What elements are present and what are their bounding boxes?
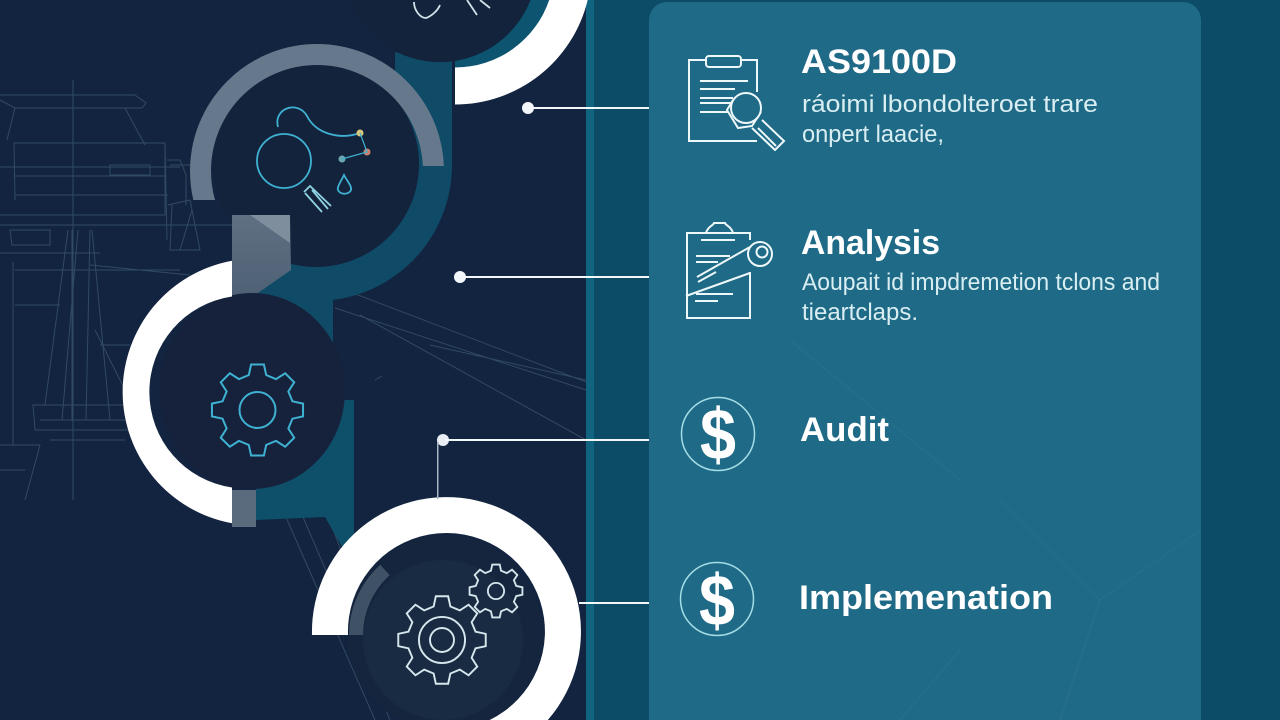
panel background xyxy=(649,2,1201,720)
background: navy left side xyxy=(0,0,590,720)
item: Audit xyxy=(682,395,889,475)
item: Analysis xyxy=(686,223,1167,326)
background: teal right side xyxy=(590,0,1280,720)
teal crescent behind top circle xyxy=(455,0,555,76)
icon: dollar badge xyxy=(680,561,754,641)
description: Analysis: tieartclaps. xyxy=(802,299,918,326)
teal connector below circle 3 xyxy=(256,400,354,552)
icon: clipboard with target xyxy=(686,223,772,318)
teal connector shape: upper xyxy=(395,52,452,170)
step 4 dark disc xyxy=(347,535,543,720)
heading: AS9100D: AS9100D xyxy=(801,43,957,81)
step 3: gear circle node xyxy=(123,261,345,527)
step 4 inner gray arc xyxy=(356,570,385,635)
connector: Audit xyxy=(437,434,649,499)
step 2 gray ring xyxy=(190,44,444,200)
heading: Audit: Audit xyxy=(800,411,889,449)
step 4 large gear xyxy=(398,596,486,684)
connector: Implementation xyxy=(579,602,649,604)
block body xyxy=(232,215,291,298)
connector: Analysis xyxy=(454,271,649,283)
step 2: magnifier circle node xyxy=(200,54,434,288)
vertical teal divider strip xyxy=(586,0,594,720)
icon: clipboard with magnifier xyxy=(689,56,784,150)
step 1 partial icon xyxy=(414,0,490,18)
step 4: double gear circle node xyxy=(312,497,581,720)
step 4 white ring xyxy=(312,497,581,720)
step 3 dark disc xyxy=(159,293,345,489)
panel: step descriptions xyxy=(649,2,1201,720)
description: AS9100D: onpert laacie, xyxy=(802,121,944,148)
description: AS9100D: ráoimi lbondolteroet trare xyxy=(802,91,1098,118)
teal lower half ring of circle 2 xyxy=(255,166,452,301)
connector: AS9100D xyxy=(522,102,649,114)
step 1: top circle node xyxy=(350,0,588,104)
icon: dollar badge: $ xyxy=(699,561,735,641)
heading: Implemenation: Implemenation xyxy=(799,579,1053,617)
icon: dollar badge: $ xyxy=(700,395,736,475)
step 2 inspection icon xyxy=(257,107,370,212)
step 3 white ring xyxy=(123,261,232,523)
item: AS9100D xyxy=(689,43,1105,150)
block highlight triangle xyxy=(250,215,290,243)
step 4 small gear xyxy=(470,565,522,617)
panel faint texture lines xyxy=(790,340,1201,720)
step 1 white ring xyxy=(455,0,588,104)
step 3 gear icon xyxy=(212,364,303,456)
gray connector block xyxy=(232,215,291,298)
blueprint sketch: machine outline xyxy=(0,80,586,720)
step 2 dark disc xyxy=(213,61,419,267)
step 3 gray ring end xyxy=(232,490,256,527)
teal connector between circles 2 and 3 xyxy=(255,285,333,360)
heading: Analysis: Analysis xyxy=(801,224,940,262)
description: Analysis: Aoupait id impdremetion tclons and xyxy=(802,269,1160,296)
item: Implementation xyxy=(680,561,1053,641)
step 4 inner lighter disc xyxy=(363,560,523,720)
icon: dollar badge xyxy=(682,395,754,475)
step 1 dark disc xyxy=(350,0,530,62)
